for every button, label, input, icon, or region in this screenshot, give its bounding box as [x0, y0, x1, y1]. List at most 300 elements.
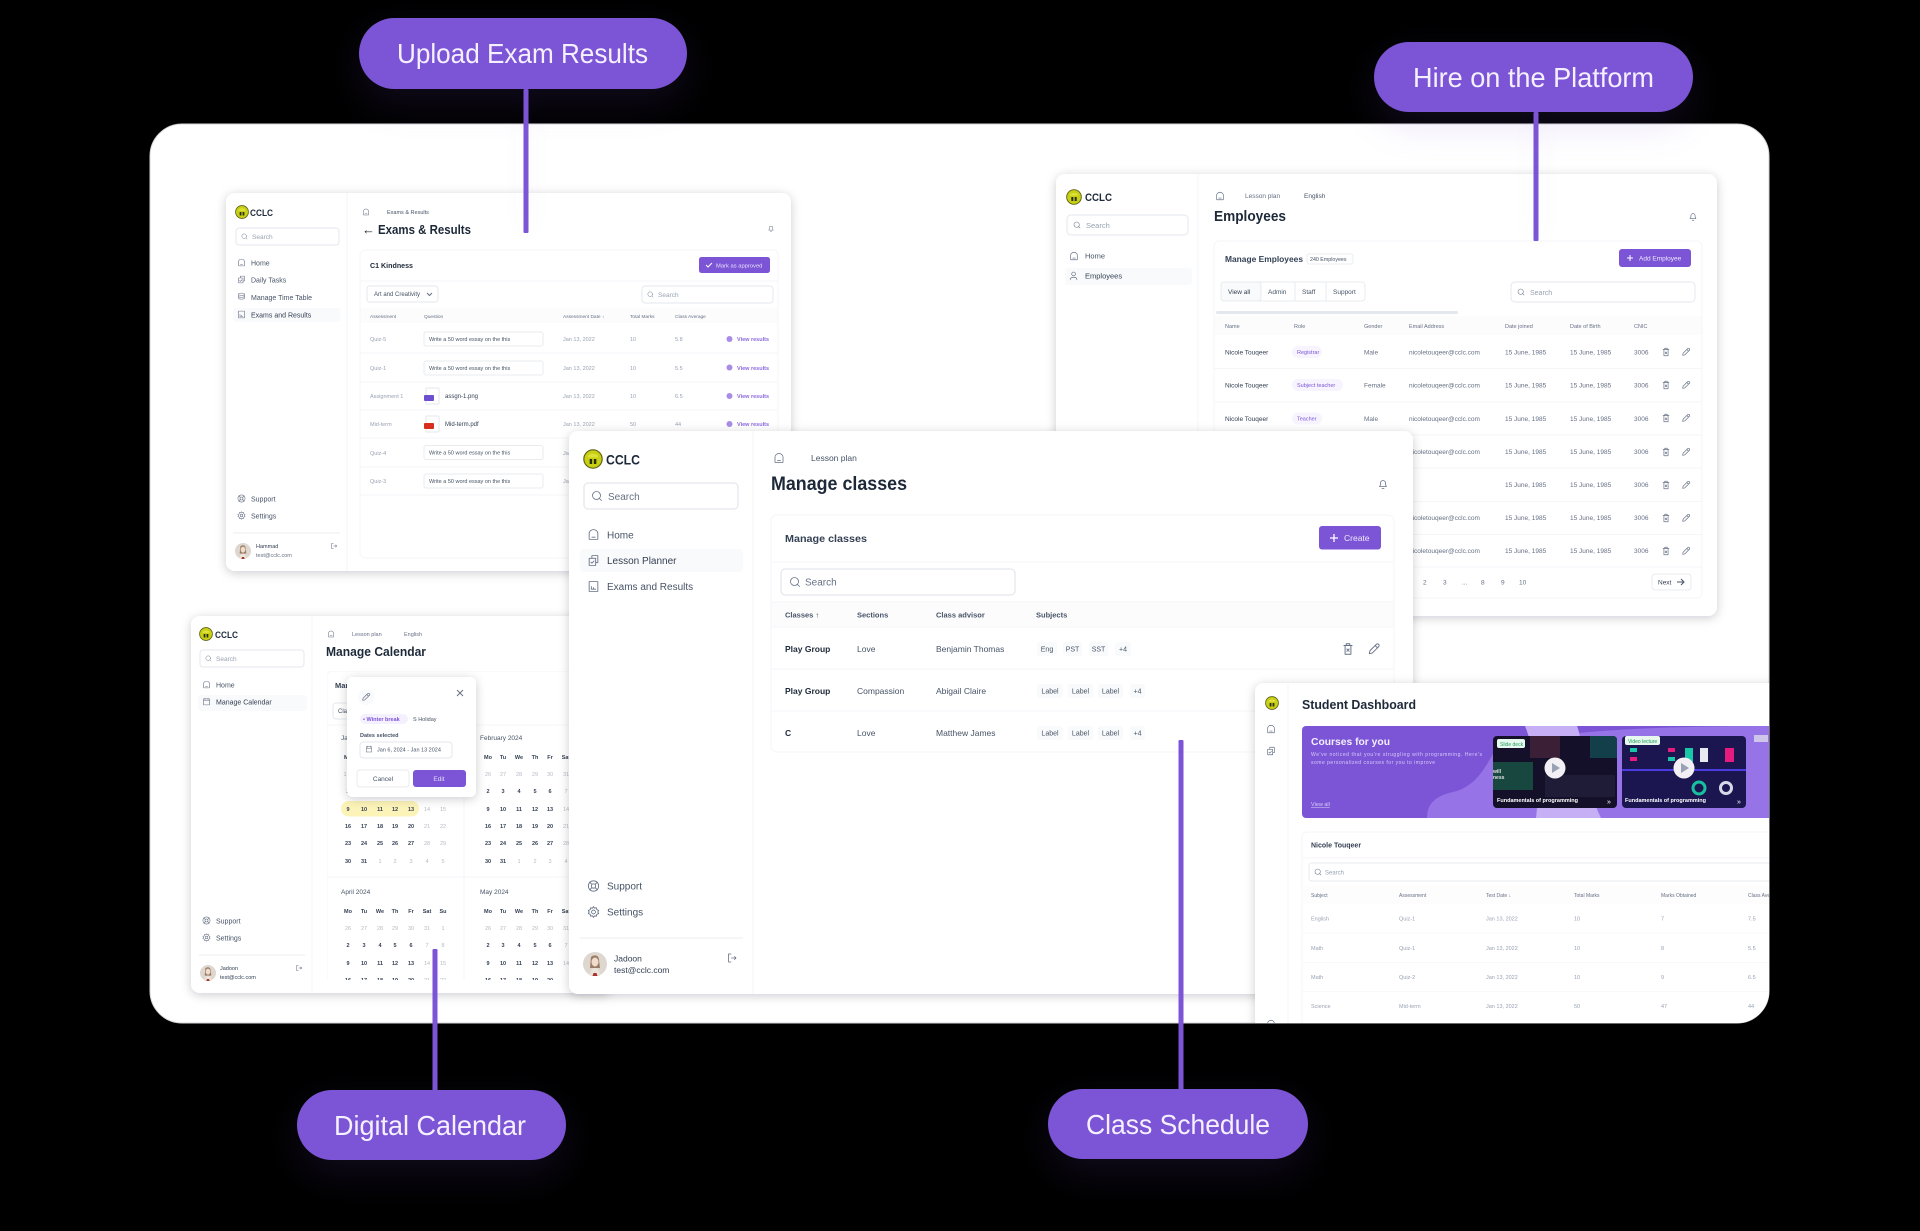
classes card: Manage classes: [785, 534, 867, 545]
exams card: Class Average: [675, 314, 706, 320]
exams card: Mid-term.pdf: [445, 422, 479, 428]
month: april: Mo: [344, 909, 353, 915]
employees card: nicoletouqeer@cclc.com: [1409, 515, 1480, 522]
month: february: Fr: [547, 755, 554, 761]
course card: slide deck: Fundamentals of programming: [1497, 798, 1578, 804]
edit event popup: • Winter break: [363, 717, 401, 723]
exams card: View results: [737, 337, 769, 343]
month: may: 9: [486, 961, 490, 967]
course card: slide deck: [1492, 736, 1617, 808]
exams card: 10: [630, 394, 636, 400]
month: february: We: [515, 755, 523, 761]
course card: slide deck: Slide deck: [1500, 742, 1524, 748]
month: january: 2: [346, 789, 350, 795]
exams sidebar: Manage Time Table: [251, 295, 312, 302]
exams card: Jan 13, 2022: [563, 479, 595, 485]
exams header: Exams & Results: [387, 210, 429, 216]
student results table: Quiz-1: [1399, 946, 1415, 952]
subject tags: Eng: [1041, 646, 1053, 654]
classes sidebar: test@cclc.com: [614, 965, 669, 975]
month: may: 29: [532, 926, 538, 932]
month: april: 30: [408, 926, 414, 932]
employees card: nicoletouqeer@cclc.com: [1409, 416, 1480, 423]
exams card: Write a 50 word essay on the this: [429, 450, 510, 456]
month: january: 1: [378, 859, 382, 865]
student results table: Marks Obtained: [1661, 893, 1697, 899]
student results table: Math: [1311, 975, 1323, 981]
callout: digital calendar: Digital Calendar: [334, 1110, 526, 1141]
student sidebar: [1266, 697, 1278, 1028]
month: april: Sat: [423, 909, 431, 915]
employees sidebar: Employees: [1085, 272, 1122, 280]
exams card: View results: [737, 366, 769, 372]
exams card: assgn-1.png: [445, 394, 478, 400]
month: april: April 2024: [341, 889, 371, 896]
month: february: 11: [516, 807, 522, 813]
pagination: Next: [1658, 580, 1672, 586]
subject tags: [1037, 642, 1145, 740]
month: april: 9: [346, 961, 350, 967]
month: january: [341, 735, 446, 865]
month: may: 12: [532, 961, 538, 967]
exams card: Jan 13, 2022: [563, 394, 595, 400]
subject tags: Label: [1102, 730, 1120, 738]
employees card: 15 June, 1985: [1505, 515, 1547, 522]
employees card: Role: [1294, 324, 1305, 330]
student results table: Class Average: [1748, 893, 1780, 899]
classes card: Search: [805, 578, 837, 588]
student title: Student Dashboard: [1302, 697, 1416, 712]
student results table: Mid-term: [1399, 1004, 1421, 1010]
employees sidebar: Home: [1085, 252, 1105, 260]
month: february: 2: [486, 789, 490, 795]
month: january: 16: [345, 824, 351, 830]
student results table: 7.5: [1748, 916, 1756, 922]
month: february: 16: [485, 824, 491, 830]
employees card: Date joined: [1505, 324, 1533, 330]
month: february: 31: [563, 772, 569, 778]
employees card: CNIC: [1634, 324, 1647, 330]
month: may: 7: [564, 943, 568, 949]
month: february: 14: [563, 807, 569, 813]
month: february: 5: [533, 789, 537, 795]
month: february: February 2024: [480, 735, 523, 742]
month: may: Fr: [547, 909, 554, 915]
month: april: 13: [408, 961, 414, 967]
month: april: 12: [392, 961, 398, 967]
student results table: 47: [1661, 1004, 1667, 1010]
employees header: English: [1304, 193, 1326, 200]
exams card: 50: [630, 422, 636, 428]
month: february: Th: [532, 755, 539, 761]
month: february: 1: [517, 859, 521, 865]
month: january: 5: [441, 859, 445, 865]
callout: upload exam results: Upload Exam Results: [397, 38, 648, 69]
calendar sidebar: Settings: [216, 936, 242, 942]
student results table: Nicole Touqeer: [1311, 842, 1361, 850]
month: january: 25: [377, 841, 383, 847]
calendar sidebar: CCLC: [215, 630, 238, 641]
classes card: C: [785, 728, 791, 738]
edit event popup: [347, 677, 476, 797]
month: january: 17: [361, 824, 367, 830]
month: february: 3: [501, 789, 505, 795]
classes sidebar: Settings: [607, 908, 643, 918]
exams card: Mark as approved: [716, 264, 762, 270]
edit event popup: Dates selected: [360, 733, 399, 739]
callout: digital calendar: [297, 949, 566, 1174]
calendar card: Class: [338, 709, 353, 715]
employees card: 15 June, 1985: [1570, 449, 1612, 456]
classes card: Classes ↑: [785, 610, 819, 620]
month: may: 6: [548, 943, 552, 949]
employees card: 15 June, 1985: [1505, 350, 1547, 356]
employees card: Nicole Touqeer: [1225, 382, 1269, 390]
calendar sidebar: Manage Calendar: [216, 700, 272, 706]
month: may: 11: [516, 961, 522, 967]
month: april: 2: [346, 943, 350, 949]
student results table: 6.5: [1748, 975, 1756, 981]
exams card: 5.5: [675, 366, 683, 372]
month: january: 27: [408, 841, 414, 847]
employees card: 3006: [1634, 515, 1649, 522]
month: april: 19: [392, 978, 398, 984]
month: february: 9: [486, 807, 490, 813]
window: exams and results: [226, 193, 791, 571]
month: may: 30: [547, 926, 553, 932]
classes sidebar: [580, 450, 743, 976]
month: january: 10: [361, 807, 367, 813]
employees card: 3006: [1634, 548, 1649, 555]
month: april: 8: [441, 943, 445, 949]
month: may: [480, 889, 570, 984]
month: january: 28: [424, 841, 430, 847]
course card: slide deck: »: [1607, 799, 1611, 806]
month: february: 25: [516, 841, 522, 847]
employees card: 3006: [1634, 416, 1649, 423]
role badges: Subject teacher: [1297, 383, 1335, 389]
employees card: Name: [1225, 324, 1240, 330]
month: february: 20: [547, 824, 553, 830]
employees card: nicoletouqeer@cclc.com: [1409, 548, 1480, 555]
month: april: 15: [440, 961, 446, 967]
month: may: 17: [500, 978, 506, 984]
month: february: 28: [563, 841, 569, 847]
employees sidebar: Search: [1086, 221, 1110, 230]
month: may: 19: [532, 978, 538, 984]
employees card: 15 June, 1985: [1570, 548, 1612, 555]
month: february: 2: [533, 859, 537, 865]
classes sidebar: CCLC: [606, 452, 640, 468]
month: february: 31: [500, 859, 506, 865]
month: february: 26: [532, 841, 538, 847]
employees header: Employees: [1214, 208, 1286, 225]
course card: video lecture: »: [1737, 799, 1741, 806]
window: employees: [1056, 174, 1717, 616]
exams card: Quiz-1: [370, 366, 386, 372]
month: april: 17: [361, 978, 367, 984]
month: april: 1: [441, 926, 445, 932]
pagination: 2: [1423, 580, 1427, 586]
employees card: Nicole Touqeer: [1225, 350, 1269, 356]
employees card: 3006: [1634, 350, 1649, 356]
month: february: 27: [500, 772, 506, 778]
month: january: 26: [392, 841, 398, 847]
calendar card: Manage Calendar: [335, 681, 397, 690]
student results table: 9: [1661, 975, 1664, 981]
month: january: Mo: [344, 755, 353, 761]
employee row actions: [1663, 348, 1690, 555]
employees card: 15 June, 1985: [1505, 482, 1547, 489]
month: april: Su: [439, 909, 447, 915]
exams sidebar: Settings: [251, 514, 277, 520]
course card: video lecture: Fundamentals of programming: [1625, 798, 1706, 804]
exams card: C1 Kindness: [370, 261, 413, 270]
classes card: Play Group: [785, 644, 830, 654]
student results table: Assessment: [1399, 893, 1427, 899]
exams card: Quiz-4: [370, 451, 386, 457]
file icon: png: [424, 388, 439, 404]
exams card: Jan 13, 2022: [563, 337, 595, 343]
employees card: 15 June, 1985: [1505, 548, 1547, 555]
employees card: Search: [1530, 290, 1552, 297]
student results table: 44: [1748, 1004, 1754, 1010]
month: january: 20: [408, 824, 414, 830]
callout: class schedule: Class Schedule: [1086, 1109, 1270, 1140]
employees card: 15 June, 1985: [1570, 350, 1612, 356]
employees card: Manage Employees: [1225, 254, 1303, 264]
exams sidebar: Search: [252, 234, 273, 241]
role badges: Teacher: [1297, 416, 1317, 422]
month: february: Sat: [562, 755, 570, 761]
student results table: Quiz-1: [1399, 916, 1415, 922]
month: february: 24: [500, 841, 507, 847]
calendar card: [327, 671, 569, 980]
exams sidebar: [233, 206, 340, 559]
classes sidebar: Search: [608, 492, 640, 503]
month: february: Tu: [500, 755, 506, 761]
course card: slide deck: will: [1492, 769, 1502, 775]
subject tags: PST: [1066, 646, 1080, 654]
employees card: nicoletouqeer@cclc.com: [1409, 350, 1480, 356]
month: may: 31: [563, 926, 569, 932]
employees card: 15 June, 1985: [1570, 382, 1612, 390]
exams card: Assignment 1: [370, 394, 403, 400]
student results table: Test Date ↓: [1486, 893, 1511, 899]
month: may: 4: [517, 943, 521, 949]
window: manage classes: [569, 431, 1413, 994]
student results table: Math: [1311, 946, 1323, 952]
exams card: Search: [658, 292, 679, 299]
student results table: 10: [1574, 916, 1580, 922]
courses banner: We've noticed that you're struggling with programming. Here's: [1311, 752, 1482, 758]
month: january: 23: [345, 841, 351, 847]
month: february: 23: [485, 841, 491, 847]
classes card: Compassion: [857, 686, 905, 696]
window: manage calendar: [191, 616, 627, 1001]
callout: upload exam results: [359, 18, 687, 233]
employees card: 15 June, 1985: [1505, 449, 1547, 456]
employees header: [1214, 192, 1696, 225]
student results table: Jan 13, 2022: [1486, 916, 1518, 922]
classes card: Play Group: [785, 686, 830, 696]
employees card: 15 June, 1985: [1570, 515, 1612, 522]
calendar sidebar: Home: [216, 682, 235, 690]
edit event popup: Edit: [433, 776, 445, 783]
exams sidebar: test@cclc.com: [256, 553, 292, 559]
month: january: 15: [440, 807, 446, 813]
month: may: 3: [501, 943, 505, 949]
employees card: 15 June, 1985: [1505, 382, 1547, 390]
month: february: 4: [517, 789, 521, 795]
course card: video lecture: Video lecture: [1628, 739, 1657, 745]
exams card: Assessment: [370, 314, 397, 320]
pagination: 9: [1501, 580, 1505, 586]
courses banner: some personalized courses for you to improve: [1311, 760, 1435, 766]
classes card: Matthew James: [936, 728, 996, 738]
exams card: 5.8: [675, 337, 683, 343]
month: april: 6: [409, 943, 413, 949]
pagination: 8: [1481, 580, 1485, 586]
exams card: 10: [630, 366, 636, 372]
month: april: Th: [392, 909, 399, 915]
classes sidebar: Jadoon: [614, 954, 642, 964]
classes header: [771, 453, 1386, 495]
month: april: 3: [362, 943, 366, 949]
exams card: 10: [630, 337, 636, 343]
edit event popup: Cancel: [373, 776, 394, 783]
employees card: 3006: [1634, 482, 1649, 489]
exams sidebar: Hammad: [256, 544, 278, 550]
classes header: Lesson plan: [811, 453, 857, 463]
employees card: Male: [1364, 350, 1378, 356]
exams card: Jan 13, 2022: [563, 366, 595, 372]
classes card: Love: [857, 728, 876, 738]
student results table: English: [1311, 916, 1329, 922]
student results table: 8: [1661, 946, 1664, 952]
employees card: Staff: [1302, 289, 1315, 296]
month: january: 12: [392, 807, 398, 813]
calendar sidebar: Search: [216, 656, 237, 663]
month: february: Mo: [484, 755, 493, 761]
pagination: 3: [1443, 580, 1447, 586]
month: april: 14: [424, 961, 430, 967]
month: april: 20: [408, 978, 414, 984]
employees card: 3006: [1634, 449, 1649, 456]
exams header: ←: [362, 222, 375, 237]
month: january: 30: [345, 859, 351, 865]
month: february: 30: [547, 772, 553, 778]
edit event popup: Jan 6, 2024 - Jan 13 2024: [377, 748, 441, 754]
month: may: 20: [547, 978, 553, 984]
month: may: 2: [486, 943, 490, 949]
month: january: 22: [440, 824, 446, 830]
month: may: 14: [563, 961, 569, 967]
employees card: 15 June, 1985: [1570, 416, 1612, 423]
exams card: Question: [424, 314, 444, 320]
student results table: Subject: [1311, 893, 1328, 899]
month: february: 30: [485, 859, 491, 865]
month: may: 16: [485, 978, 491, 984]
student results table: [1302, 832, 1782, 1032]
employees card: Admin: [1268, 289, 1287, 296]
exams sidebar: Home: [251, 260, 270, 268]
month: january: 18: [377, 824, 383, 830]
calendar header: [326, 631, 426, 659]
pagination: ...: [1462, 580, 1468, 586]
month: may: We: [515, 909, 523, 915]
student results table: 5.5: [1748, 946, 1756, 952]
student results table: Total Marks: [1574, 893, 1600, 899]
month: january: 14: [424, 807, 430, 813]
month: february: 29: [532, 772, 538, 778]
subject tags: +4: [1119, 646, 1127, 654]
month: february: 10: [500, 807, 506, 813]
subject tags: SST: [1092, 646, 1106, 654]
student results table: Search: [1325, 870, 1344, 876]
month: may: 26: [485, 926, 491, 932]
exams card: 44: [675, 422, 681, 428]
month: may: 13: [547, 961, 553, 967]
employees card: nicoletouqeer@cclc.com: [1409, 449, 1480, 456]
employees card: Email Address: [1409, 324, 1444, 330]
employees card: 15 June, 1985: [1570, 482, 1612, 489]
month: may: 28: [516, 926, 522, 932]
exams card: Art and Creativity: [374, 292, 420, 298]
exams card: [360, 250, 778, 558]
month: april: 28: [377, 926, 383, 932]
month: january: 31: [361, 859, 367, 865]
exams card: Mid-term: [370, 422, 392, 428]
month: april: 11: [377, 961, 383, 967]
month: april: 26: [345, 926, 351, 932]
courses banner: View all: [1311, 802, 1330, 808]
month: april: 29: [392, 926, 398, 932]
classes card: Subjects: [1036, 610, 1067, 620]
file icon: pdf: [424, 416, 439, 432]
month: april: 18: [377, 978, 383, 984]
exams sidebar: Exams and Results: [251, 312, 312, 320]
month: february: 12: [532, 807, 538, 813]
student results table: 7: [1661, 916, 1664, 922]
exams card: Quiz-5: [370, 337, 386, 343]
month: february: 28: [516, 772, 522, 778]
employees card: 15 June, 1985: [1505, 416, 1547, 423]
month: april: 5: [393, 943, 397, 949]
employees sidebar: [1065, 190, 1192, 285]
classes sidebar: Support: [607, 882, 642, 892]
month: may: 18: [516, 978, 522, 984]
exams header: Exams & Results: [378, 222, 471, 237]
calendar sidebar: [198, 628, 307, 981]
calendar sidebar: Support: [216, 918, 241, 926]
employees sidebar: CCLC: [1085, 192, 1112, 204]
student results table: 50: [1574, 1004, 1580, 1010]
month: january: 1: [343, 772, 347, 778]
month: april: 21: [424, 978, 430, 984]
month: february: 6: [548, 789, 552, 795]
role badges: [1292, 346, 1343, 424]
employees card: 3006: [1634, 382, 1649, 390]
employees card: Support: [1333, 289, 1356, 296]
student results table: 10: [1574, 975, 1580, 981]
month: february: 17: [500, 824, 506, 830]
month: january: 13: [408, 807, 414, 813]
exams card: View results: [737, 422, 769, 428]
month: january: 21: [424, 824, 430, 830]
classes card: Love: [857, 644, 876, 654]
classes card: Benjamin Thomas: [936, 644, 1004, 654]
